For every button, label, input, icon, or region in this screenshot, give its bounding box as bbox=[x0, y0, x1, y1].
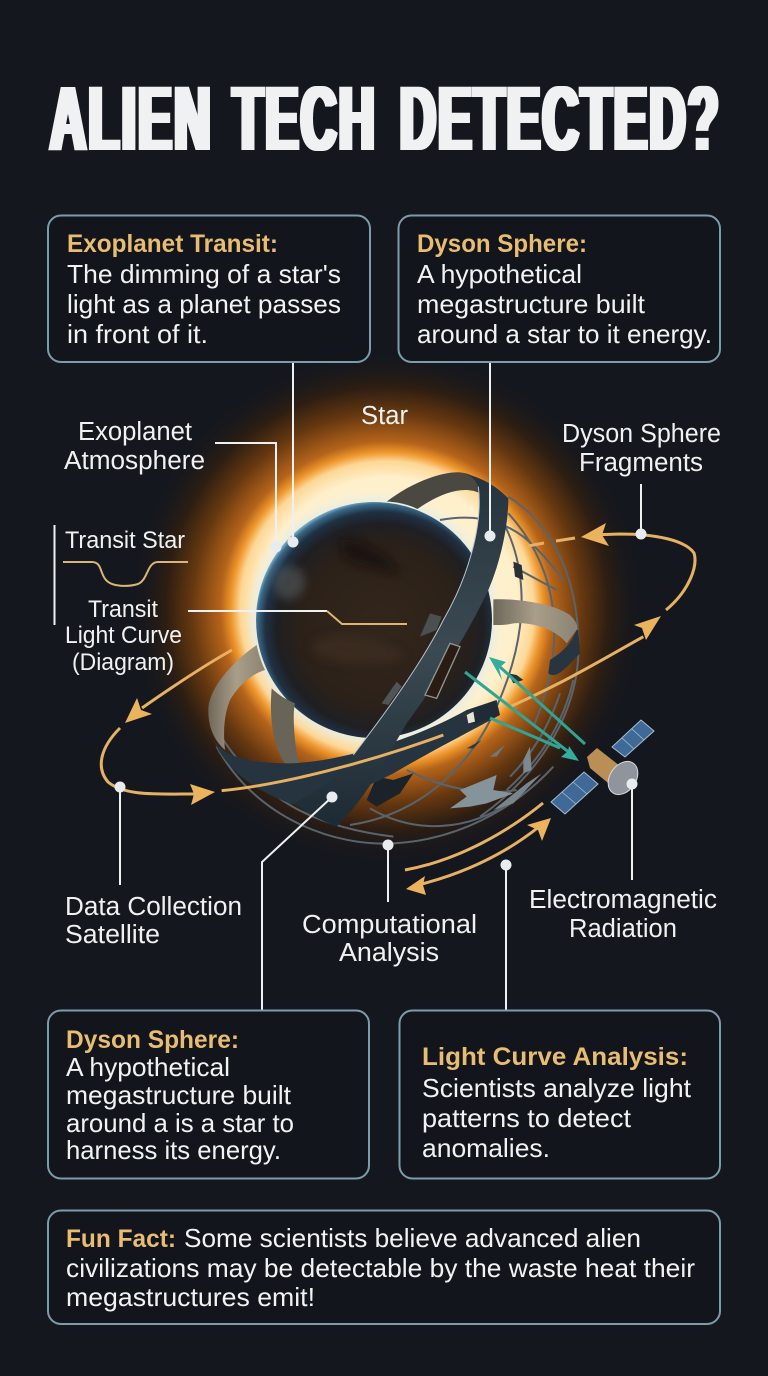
left tan ring bbox=[208, 645, 265, 750]
label: exoplanet atmosphere: Exoplanet bbox=[78, 418, 192, 446]
body: light curve analysis: patterns to detect bbox=[422, 1103, 632, 1133]
title: ALIEN bbox=[50, 68, 213, 170]
label: star: Star bbox=[361, 402, 408, 430]
body: dyson sphere top bbox=[417, 259, 712, 349]
debris fragments bbox=[367, 562, 542, 810]
label: dyson sphere fragments: Fragments bbox=[579, 449, 703, 477]
orbit arrows bbox=[101, 523, 695, 895]
body: fun fact: Some scientists believe advanced alien bbox=[184, 1223, 641, 1253]
heading: exoplanet transit: Exoplanet Transit: bbox=[67, 230, 278, 258]
label: transit light curve bbox=[65, 596, 182, 676]
panel: dyson sphere bottom bbox=[48, 1010, 369, 1178]
label: dyson sphere fragments: Dyson Sphere bbox=[562, 420, 721, 448]
heading: dyson sphere top: Dyson Sphere: bbox=[417, 230, 587, 258]
dish bbox=[602, 756, 644, 800]
body: dyson sphere bottom: A hypothetical bbox=[66, 1052, 230, 1082]
label: transit light curve: Transit bbox=[88, 596, 158, 623]
solar panel upper bbox=[612, 720, 654, 757]
left loop bbox=[101, 650, 232, 805]
satellite body bbox=[587, 748, 620, 783]
body: dyson sphere top: around a star to it energy. bbox=[417, 319, 712, 349]
heading: light curve analysis: Light Curve Analysis: bbox=[422, 1043, 688, 1071]
body: dyson sphere bottom: around a is a star to bbox=[66, 1108, 294, 1138]
title: TECH bbox=[233, 68, 377, 170]
title bbox=[50, 68, 721, 170]
label: data collection satellite bbox=[65, 893, 242, 949]
label: computational analysis: Computational bbox=[302, 911, 477, 939]
sphere wireframe bbox=[217, 490, 578, 844]
body: light curve analysis: Scientists analyze light bbox=[422, 1073, 692, 1103]
planet bbox=[251, 497, 497, 743]
lower arrows bbox=[405, 803, 551, 895]
label: exoplanet atmosphere bbox=[64, 418, 205, 475]
attached panels bbox=[382, 613, 499, 725]
body: exoplanet transit: light as a planet passes bbox=[67, 289, 341, 319]
panel: dyson sphere top bbox=[398, 216, 720, 362]
label: dyson sphere fragments bbox=[562, 420, 721, 477]
panel: light curve analysis bbox=[400, 1010, 720, 1178]
label: transit light curve: (Diagram) bbox=[72, 649, 174, 676]
heading: fun fact: Fun Fact: bbox=[66, 1225, 176, 1253]
label: electromagnetic radiation: Radiation bbox=[569, 915, 677, 943]
body: fun fact: civilizations may be detectable by the waste heat their bbox=[66, 1253, 695, 1283]
inner vertical ring bbox=[271, 688, 310, 802]
panel: exoplanet transit bbox=[48, 216, 370, 362]
label: computational analysis: Analysis bbox=[339, 939, 439, 967]
back tan ring bbox=[493, 599, 577, 643]
main diagonal band bbox=[293, 473, 508, 827]
label: data collection satellite: Satellite bbox=[65, 921, 160, 949]
body: dyson sphere top: megastructure built bbox=[417, 289, 646, 319]
teal radiation arrows bbox=[465, 657, 585, 761]
label: exoplanet atmosphere: Atmosphere bbox=[64, 447, 205, 475]
right loop bbox=[528, 523, 695, 610]
body: exoplanet transit: in front of it. bbox=[67, 319, 208, 349]
label: computational analysis bbox=[302, 911, 477, 967]
central illustration: planet and Dyson sphere bbox=[208, 472, 580, 844]
body: fun fact: megastructures emit! bbox=[66, 1282, 315, 1312]
icon: satellite bbox=[551, 720, 654, 814]
heading: dyson sphere bottom: Dyson Sphere: bbox=[66, 1026, 239, 1054]
label: data collection satellite: Data Collection bbox=[65, 893, 242, 921]
body: light curve analysis: anomalies. bbox=[422, 1133, 550, 1163]
chart: transit light curve bbox=[63, 562, 188, 586]
leader lines bbox=[54, 362, 646, 1010]
top ring strip bbox=[387, 472, 480, 509]
body: exoplanet transit bbox=[67, 259, 341, 349]
label: transit light curve: Light Curve bbox=[65, 622, 182, 649]
body: dyson sphere bottom: harness its energy. bbox=[66, 1135, 281, 1165]
body: exoplanet transit: The dimming of a star's bbox=[67, 259, 341, 289]
body: fun fact bbox=[66, 1223, 695, 1312]
panel: fun fact bbox=[48, 1210, 720, 1324]
solar panel lower bbox=[551, 772, 598, 814]
body: dyson sphere top: A hypothetical bbox=[417, 259, 582, 289]
ring continuation right bbox=[548, 630, 580, 675]
body: dyson sphere bottom bbox=[66, 1052, 294, 1165]
body: light curve analysis bbox=[422, 1073, 692, 1163]
label: electromagnetic radiation bbox=[529, 886, 717, 943]
label: electromagnetic radiation: Electromagnetic bbox=[529, 886, 717, 914]
label: transit star: Transit Star bbox=[65, 527, 185, 554]
star bbox=[127, 348, 647, 868]
main orbit line bbox=[222, 616, 661, 791]
lower ring bbox=[213, 700, 500, 805]
body: dyson sphere bottom: megastructure built bbox=[66, 1080, 292, 1110]
